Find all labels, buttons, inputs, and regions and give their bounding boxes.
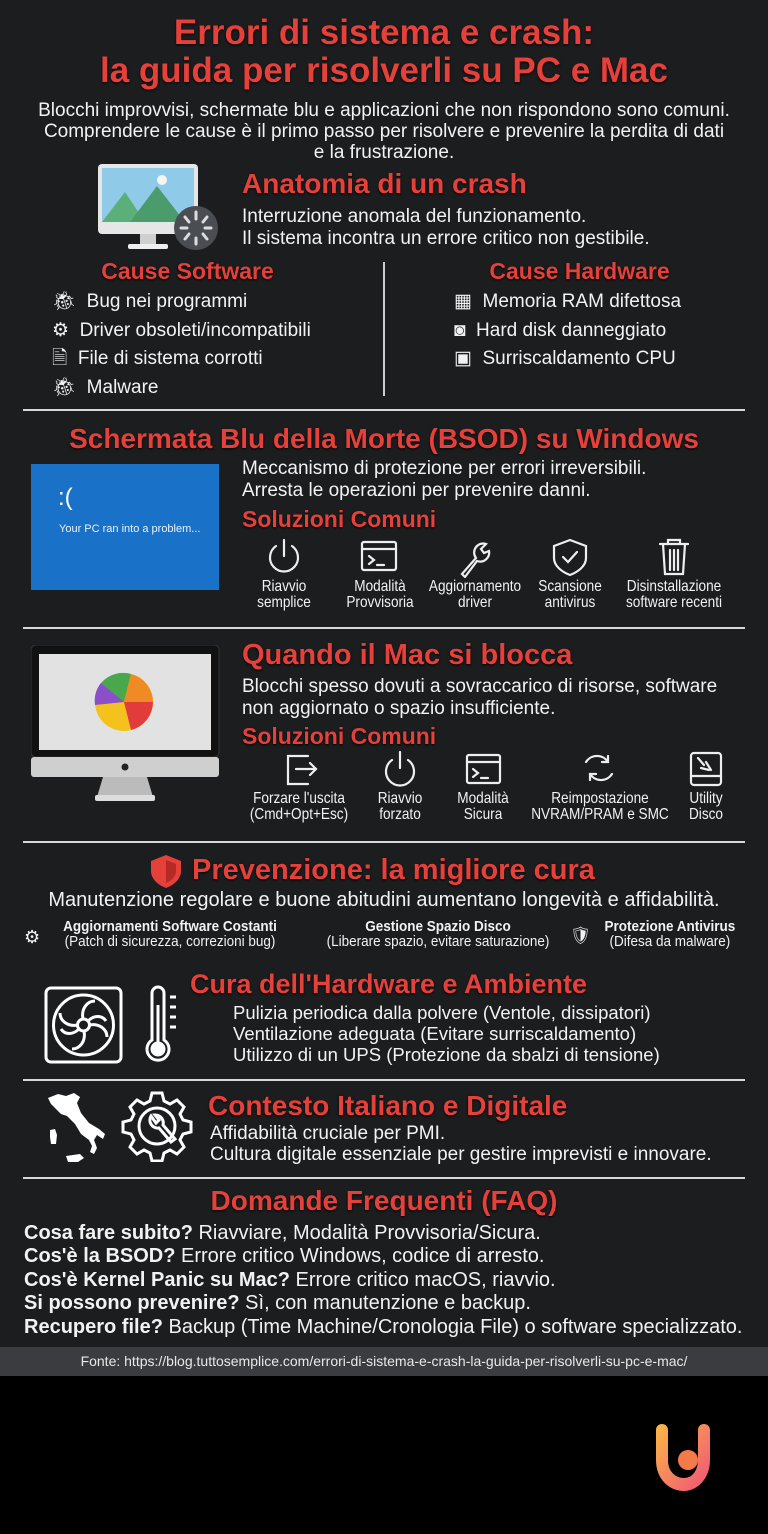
- list: hardware causes: ▣ Surriscaldamento CPU: [454, 348, 676, 369]
- list: software causes: [52, 290, 311, 398]
- subtitle: Blocchi improvvisi, schermate blu e applicazioni che non rispondono sono comuni.: [38, 100, 730, 121]
- text: mac desc: Blocchi spesso dovuti a sovraccarico di risorse, software: [242, 676, 717, 697]
- heading: cause hardware: Cause Hardware: [489, 258, 670, 284]
- heading: cause software: Cause Software: [101, 258, 274, 284]
- heading: contesto: Contesto Italiano e Digitale: [208, 1090, 567, 1121]
- text: Disco: [689, 806, 723, 823]
- list: hardware causes: ▦ Memoria RAM difettosa: [454, 291, 681, 312]
- text: Riavvio: [262, 578, 306, 595]
- text: hardware care list: Pulizia periodica dalla polvere (Ventole, dissipatori): [233, 1002, 651, 1023]
- heading: hardware care: Cura dell'Hardware e Ambiente: [190, 969, 587, 999]
- icon: fan: [44, 986, 122, 1064]
- text: NVRAM/PRAM e SMC: [531, 806, 669, 823]
- text: contesto desc: [210, 1123, 712, 1165]
- text: antivirus: [545, 594, 595, 611]
- list: software causes: 🗎︎ File di sistema corrotti: [52, 348, 263, 369]
- item: updates: [24, 918, 277, 950]
- title: la guida per risolverli su PC e Mac: [100, 51, 668, 90]
- subtitle: e la frustrazione.: [314, 142, 454, 163]
- text: anatomia desc: Il sistema incontra un errore critico non gestibile.: [242, 228, 650, 249]
- text: (Cmd+Opt+Esc): [250, 806, 348, 823]
- heading: soluzioni windows: Soluzioni Comuni: [242, 506, 436, 532]
- list: hardware causes: [454, 291, 682, 369]
- list: hardware causes: ◙ Hard disk danneggiato: [454, 320, 666, 340]
- image: blue screen: :(: [58, 484, 73, 511]
- text: Modalità: [354, 578, 406, 595]
- text: bsod desc: Arresta le operazioni per prevenire danni.: [242, 480, 591, 501]
- text: Scansione: [538, 578, 602, 595]
- prevention items: [24, 918, 735, 950]
- icon: monitor with spinner: [98, 164, 218, 250]
- heading: FAQ: Domande Frequenti (FAQ): [211, 1185, 557, 1216]
- text: semplice: [257, 594, 311, 611]
- heading: mac: Quando il Mac si blocca: [242, 639, 572, 671]
- item: antivirus: Protezione Antivirus: [605, 918, 735, 935]
- heading: anatomia: Anatomia di un crash: [242, 168, 527, 199]
- list: software causes: 🐞︎ Bug nei programmi: [52, 291, 247, 312]
- text: Disinstallazione: [627, 578, 721, 595]
- text: hardware care list: [233, 1002, 660, 1065]
- subtitle: [38, 100, 730, 163]
- text: Utility: [689, 790, 723, 807]
- text: anatomia desc: Interruzione anomala del funzionamento.: [242, 206, 586, 227]
- image: blue screen: [31, 464, 219, 590]
- item: updates: (Patch di sicurezza, correzioni bug): [65, 933, 275, 950]
- title: Errori di sistema e crash:: [174, 13, 594, 52]
- panel: cause software: [52, 258, 311, 398]
- footer: source: [0, 1347, 768, 1376]
- title: [100, 13, 668, 91]
- text: FAQ list: Cos'è Kernel Panic su Mac? Errore critico macOS, riavvio.: [24, 1269, 556, 1291]
- text: hardware care list: Ventilazione adeguata (Evitare surriscaldamento): [233, 1023, 636, 1044]
- labels: windows solutions: [257, 578, 722, 611]
- text: software recenti: [626, 594, 722, 611]
- item: antivirus: (Difesa da malware): [610, 933, 730, 950]
- text: Sicura: [464, 806, 502, 823]
- text: driver: [458, 594, 492, 611]
- image: iMac with beachball: [31, 645, 220, 801]
- icons row: mac solutions: [286, 750, 722, 787]
- divider vertical: [383, 262, 385, 396]
- text: bsod desc: Meccanismo di protezione per errori irreversibili.: [242, 458, 646, 479]
- item: updates: Aggiornamenti Software Costanti: [63, 918, 277, 935]
- list: software causes: 🐞︎ Malware: [52, 376, 158, 398]
- text: FAQ list: [24, 1222, 742, 1338]
- text: hardware care list: Utilizzo di un UPS (Protezione da sbalzi di tensione): [233, 1044, 660, 1065]
- item: disk: (Liberare spazio, evitare saturazione): [327, 933, 549, 950]
- text: Provvisoria: [346, 594, 414, 611]
- text: FAQ list: Si possono prevenire? Sì, con manutenzione e backup.: [24, 1292, 531, 1314]
- item: antivirus: [570, 918, 735, 950]
- text: prevenzione desc: Manutenzione regolare e buone abitudini aumentano longevità e affidabilità.: [48, 889, 720, 911]
- item: disk: Gestione Spazio Disco: [365, 918, 511, 935]
- icon: thermometer: [146, 986, 176, 1062]
- image: blue screen: Your PC ran into a problem...: [59, 523, 200, 535]
- subtitle: Comprendere le cause è il primo passo per risolvere e prevenire la perdita di dati: [44, 121, 724, 142]
- text: FAQ list: Cosa fare subito? Riavviare, Modalità Provvisoria/Sicura.: [24, 1222, 541, 1244]
- logo: [656, 1424, 710, 1491]
- icon: gear with wrench: [122, 1092, 192, 1162]
- item: antivirus: 🛡︎: [570, 926, 592, 945]
- labels: mac solutions: [250, 790, 723, 823]
- text: Reimpostazione: [551, 790, 649, 807]
- heading: BSOD: Schermata Blu della Morte (BSOD) su Windows: [69, 423, 699, 454]
- heading: soluzioni mac: Soluzioni Comuni: [242, 723, 436, 749]
- text: mac desc: [242, 676, 717, 719]
- list: software causes: ⚙︎ Driver obsoleti/incompatibili: [52, 320, 311, 340]
- text: FAQ list: Cos'è la BSOD? Errore critico Windows, codice di arresto.: [24, 1245, 544, 1267]
- icon: shield: [151, 855, 181, 888]
- text: contesto desc: Cultura digitale essenziale per gestire imprevisti e innovare.: [210, 1144, 712, 1165]
- text: contesto desc: Affidabilità cruciale per PMI.: [210, 1123, 445, 1144]
- text: bsod desc: [242, 458, 646, 501]
- heading: prevenzione with shield: Prevenzione: la migliore cura: [192, 854, 595, 886]
- text: Riavvio: [378, 790, 422, 807]
- footer: source: Fonte: https://blog.tuttosemplice.com/errori-di-sistema-e-crash-la-guida-per-risolverli-su-pc-e-mac/: [81, 1353, 687, 1369]
- text: forzato: [379, 806, 421, 823]
- text: anatomia desc: [242, 206, 650, 249]
- item: updates: ⚙︎: [24, 927, 40, 947]
- text: Forzare l'uscita: [253, 790, 345, 807]
- text: Modalità: [457, 790, 509, 807]
- icon: italy map: [48, 1093, 105, 1162]
- text: Aggiornamento: [429, 578, 521, 595]
- icons row: windows solutions: [268, 538, 690, 578]
- text: mac desc: non aggiornato o spazio insufficiente.: [242, 698, 555, 719]
- text: FAQ list: Recupero file? Backup (Time Machine/Cronologia File) o software specializzato.: [24, 1316, 742, 1338]
- panel: cause hardware: [454, 258, 682, 369]
- item: disk: [327, 918, 549, 950]
